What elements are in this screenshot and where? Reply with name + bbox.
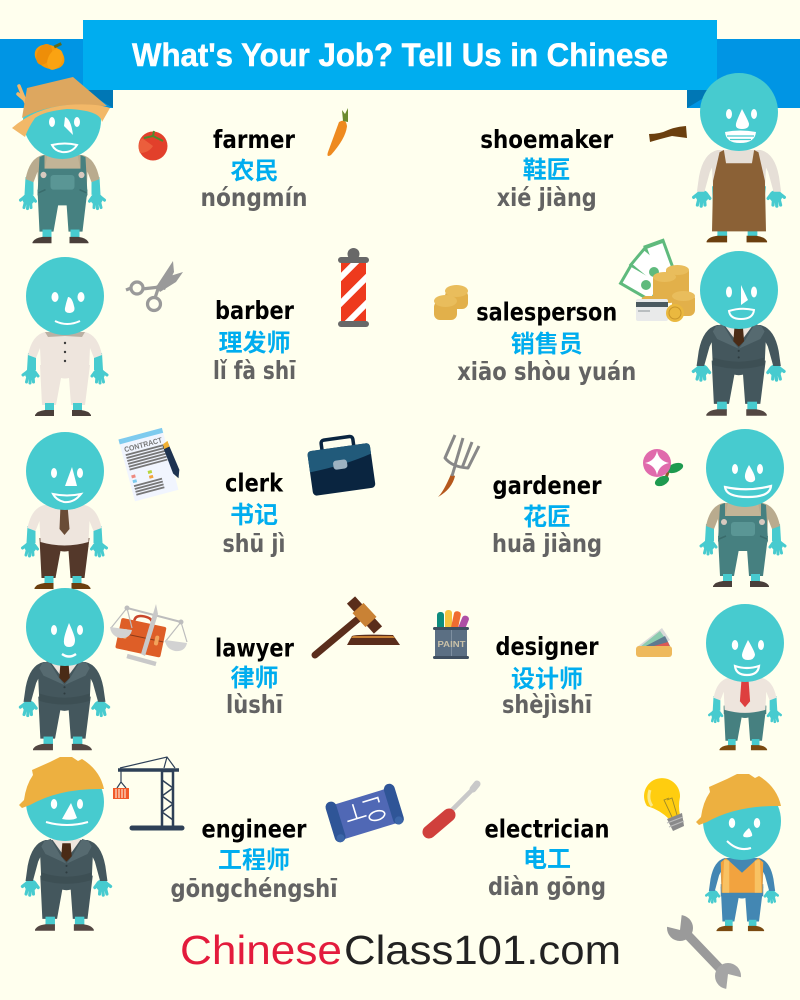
- icon: contract: CONTRACT: [123, 435, 164, 454]
- text: lawyer: lawyer: [215, 634, 295, 663]
- text: barber: barber: [215, 296, 295, 325]
- text: gardener: gardener: [492, 471, 602, 500]
- figure: salesperson: [693, 251, 784, 416]
- text: lawyer: 律师: [230, 665, 278, 692]
- text: designer: designer: [496, 632, 599, 661]
- title: What's Your Job? Tell Us in Chinese: [132, 37, 668, 73]
- text: electrician: electrician: [484, 815, 610, 844]
- text: salesperson: xiāo shòu yuán: [457, 357, 636, 386]
- icon: screwdriver: [429, 784, 477, 832]
- icon: money and credit card: [619, 238, 695, 322]
- text: farmer: [200, 125, 308, 212]
- icon: scales and briefcase: [110, 604, 187, 664]
- text: barber: [213, 296, 296, 385]
- text: farmer: farmer: [213, 125, 296, 154]
- icon: contract: [118, 426, 184, 501]
- icon: wrench: [662, 912, 746, 992]
- text: shoemaker: shoemaker: [480, 125, 614, 154]
- text: lawyer: [215, 634, 295, 719]
- text: clerk: [222, 469, 286, 558]
- text: designer: 设计师: [511, 666, 583, 693]
- text: clerk: clerk: [225, 469, 284, 498]
- text: salesperson: [457, 298, 636, 386]
- text: barber: 理发师: [218, 330, 290, 357]
- logo text: [180, 927, 621, 973]
- icon: barber pole: [338, 248, 369, 331]
- text: designer: [496, 632, 599, 719]
- text: salesperson: salesperson: [476, 298, 617, 327]
- icon: scissors: [126, 261, 183, 310]
- text: electrician: [484, 815, 610, 901]
- text: salesperson: 销售员: [511, 331, 583, 358]
- icon: blueprint: [324, 782, 405, 844]
- icon: flower: [643, 449, 685, 488]
- logo text: Chinese: [180, 927, 342, 973]
- text: engineer: 工程师: [218, 847, 290, 874]
- text: shoemaker: xié jiàng: [497, 183, 597, 212]
- text: gardener: 花匠: [523, 504, 571, 531]
- text: electrician: diàn gōng: [488, 872, 606, 901]
- text: farmer: 农民: [230, 158, 278, 185]
- text: gardener: [492, 471, 602, 558]
- icon: paint bucket: [433, 610, 470, 659]
- text: shoemaker: 鞋匠: [523, 157, 571, 184]
- figure: electrician: [696, 774, 781, 931]
- text: electrician: 电工: [523, 846, 571, 873]
- logo text: Class101.com: [344, 927, 621, 973]
- figure: farmer: [12, 77, 110, 243]
- icon: tomato: [138, 131, 168, 160]
- text: engineer: engineer: [202, 815, 307, 844]
- icon: colour swatch: [636, 628, 672, 657]
- banner: [0, 20, 800, 108]
- icon: paint bucket: PAINT: [438, 640, 466, 649]
- figure: lawyer: [20, 588, 109, 750]
- icon: briefcase: [306, 434, 376, 496]
- icon: garden fork: [438, 435, 479, 497]
- figure: barber: [23, 257, 107, 416]
- icon: gavel: [315, 600, 400, 655]
- text: gardener: huā jiàng: [492, 529, 602, 558]
- icon: shoe: [649, 126, 687, 142]
- text: farmer: nóngmín: [200, 183, 308, 212]
- text: shoemaker: [480, 125, 614, 212]
- figure: shoemaker: [694, 73, 784, 242]
- icon: light bulb: [644, 778, 684, 831]
- text: barber: lǐ fà shī: [213, 356, 296, 385]
- text: engineer: [170, 815, 338, 903]
- icon: pumpkin: [31, 35, 71, 74]
- figure: designer: [706, 604, 784, 750]
- icon: coins: [434, 285, 468, 320]
- text: clerk: 书记: [230, 502, 278, 529]
- figure: clerk: [22, 432, 106, 589]
- icon: tower crane: [113, 757, 182, 828]
- text: clerk: shū jì: [222, 529, 286, 558]
- figure: gardener: [701, 429, 785, 587]
- text: engineer: gōngchéngshī: [170, 874, 338, 903]
- text: lawyer: lùshī: [226, 690, 283, 719]
- figure: engineer: [19, 757, 111, 931]
- icon: carrot: [327, 108, 348, 156]
- text: designer: shèjìshī: [502, 690, 592, 719]
